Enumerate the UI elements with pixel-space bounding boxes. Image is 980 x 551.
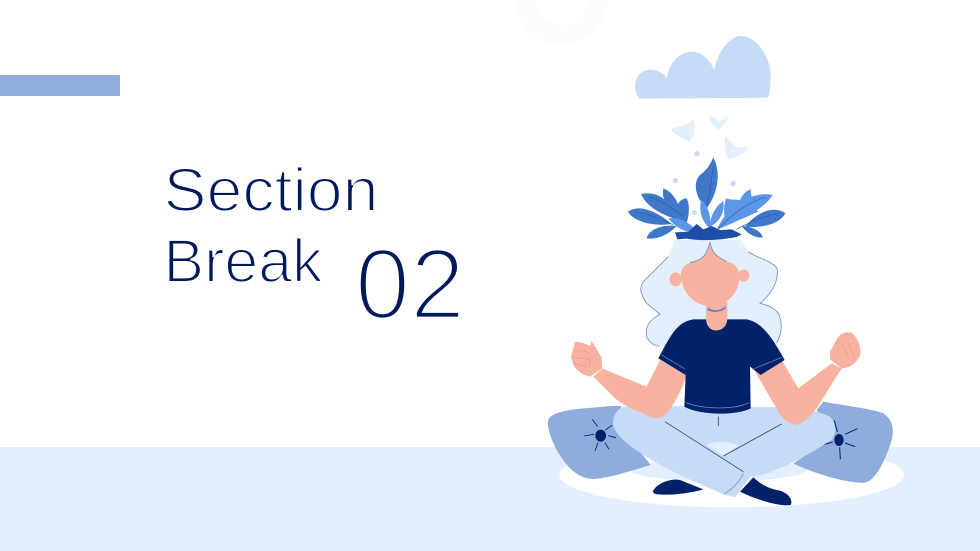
head and neck bbox=[670, 242, 749, 330]
title: Section Break: Break bbox=[164, 227, 323, 295]
floor ellipse bbox=[559, 443, 904, 507]
decorative ring bbox=[526, 0, 598, 35]
section number: 02 bbox=[355, 228, 465, 340]
accent bar bbox=[0, 75, 120, 96]
right cushion bbox=[793, 402, 893, 483]
floor band bbox=[0, 447, 980, 551]
title: Section Break bbox=[164, 156, 378, 295]
title: Section Break: Section bbox=[164, 156, 378, 224]
shoes bbox=[653, 477, 791, 505]
arms and fists bbox=[571, 332, 860, 425]
icon: cloud bbox=[635, 36, 771, 99]
left cushion bbox=[548, 406, 651, 479]
t-shirt bbox=[658, 319, 785, 414]
icon: falling hearts and dots bbox=[671, 115, 749, 186]
illustration: meditating woman bbox=[548, 157, 904, 507]
hair bbox=[641, 240, 781, 346]
legs bbox=[613, 406, 835, 497]
leaf crown bbox=[628, 157, 785, 240]
